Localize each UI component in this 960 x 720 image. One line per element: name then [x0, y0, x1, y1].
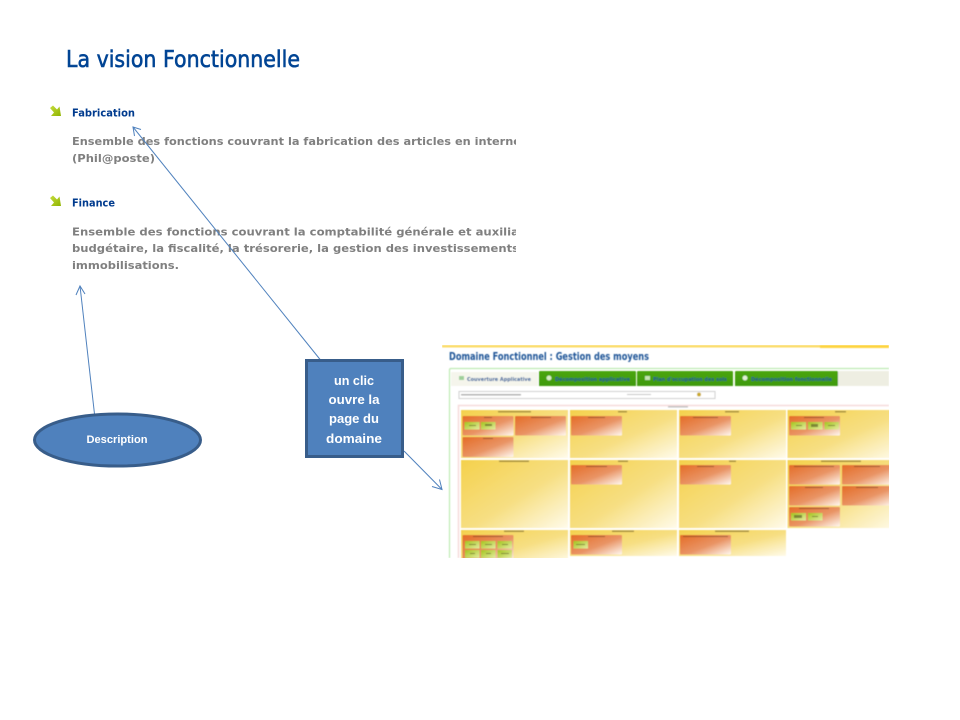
search field [459, 392, 715, 398]
tab bar [451, 371, 889, 386]
heading: Fabrication: Fabrication [72, 106, 135, 120]
tab: Décomposition fonctionnelle: Décomposition fonctionnelle [751, 376, 832, 383]
callout: un clic ouvre la page du domaine: page du [329, 411, 379, 426]
arrow: to description text [76, 286, 94, 414]
title: La vision Fonctionnelle [66, 47, 300, 73]
text block: Finance description: immobilisations. [72, 259, 179, 272]
section: Finance [50, 196, 519, 272]
icon: green arrow Finance [50, 196, 61, 206]
section: Fabrication [50, 106, 521, 165]
heading: Finance: Finance [72, 196, 115, 210]
callout: Description ellipse [34, 414, 200, 466]
tab: Décomposition applicative [539, 371, 636, 386]
pink map frame [458, 406, 889, 558]
text block: Finance description [72, 226, 519, 272]
text block: Fabrication description: (Phil@poste) [72, 152, 155, 165]
map cells [461, 410, 898, 562]
callout: un clic ouvre la page du domaine: domaine [326, 431, 382, 446]
top yellow bar [442, 345, 889, 348]
screenshot: Domaine Fonctionnel page [442, 345, 898, 562]
text block: Finance description: Ensemble des fonctions couvrant la comptabilité générale et auxilia [72, 226, 519, 238]
chip label marks [469, 424, 835, 554]
tile label marks [473, 417, 880, 537]
tab: Décomposition fonctionnelle [735, 371, 838, 386]
tab: Couverture Applicative: Couverture Applicative [467, 377, 531, 383]
tab: Couverture Applicative [451, 372, 538, 386]
arrow: to Fabrication [133, 127, 320, 360]
orange tiles [462, 416, 893, 562]
callout: un clic ouvre la page du domaine [306, 360, 402, 456]
cell label marks [498, 411, 861, 532]
arrow: to screenshot [404, 451, 442, 490]
tab: Plan d'occupation des sols [637, 371, 733, 386]
text block: Finance description: budgétaire, la fiscalité, la trésorerie, la gestion des investissements [72, 242, 519, 255]
green chips [464, 422, 839, 558]
callout: Description ellipse: Description [86, 434, 148, 446]
screenshot title: Domaine Fonctionnel : Gestion des moyens [449, 351, 649, 363]
outer frame [450, 368, 889, 558]
callout: un clic ouvre la page du domaine: un clic [334, 373, 374, 388]
text block: Fabrication description [73, 137, 516, 164]
text block: Fabrication description: Ensemble des fonctions couvrant la fabrication des articles en interne [72, 135, 521, 148]
icon: green arrow Fabrication [50, 106, 61, 116]
tab: Plan d'occupation des sols: Plan d'occupation des sols [653, 377, 728, 383]
callout: un clic ouvre la page du domaine: ouvre la [328, 392, 380, 407]
tab: Décomposition applicative: Décomposition applicative [555, 376, 630, 383]
